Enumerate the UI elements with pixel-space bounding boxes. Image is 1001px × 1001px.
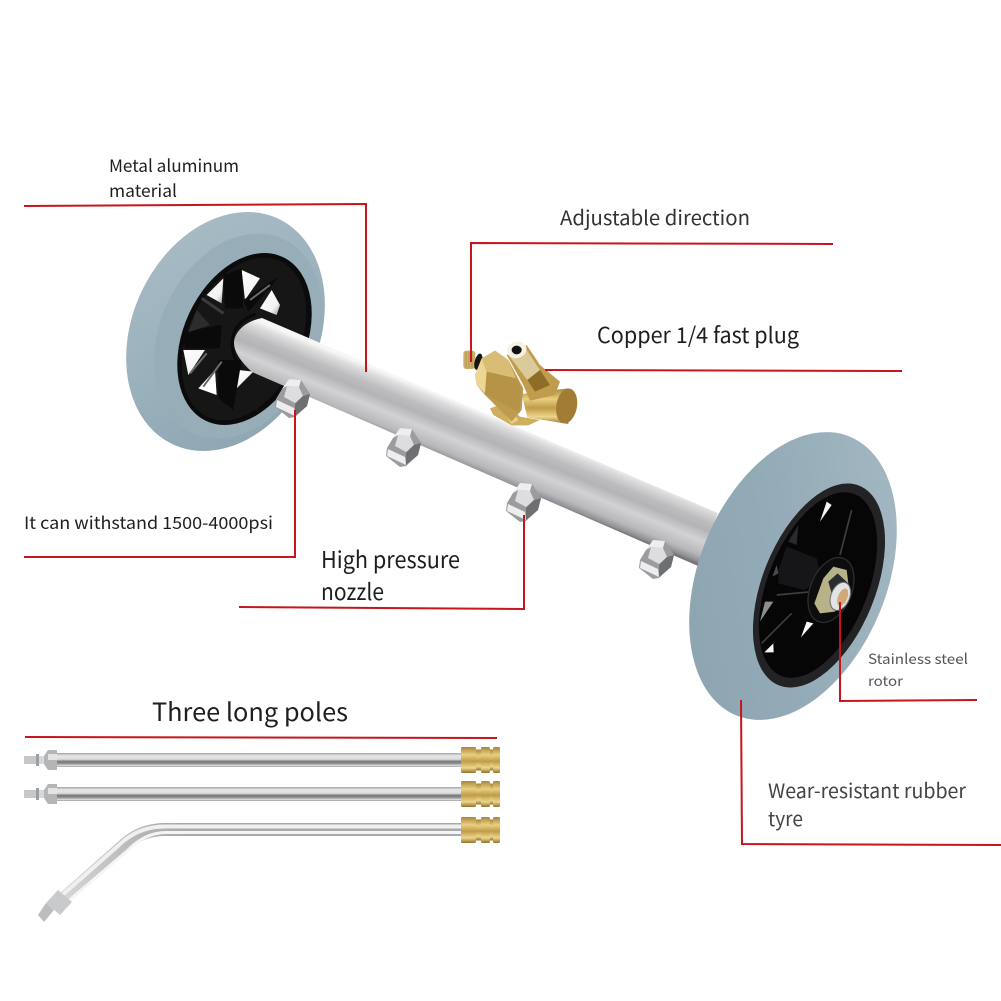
nozzles: [275, 379, 674, 579]
label: adjustable direction: Adjustable direction: [560, 202, 750, 231]
heading: three long poles: Three long poles: [152, 693, 348, 729]
label: stainless steel rotor: [868, 649, 968, 691]
label: stainless steel rotor: Stainless steel: [868, 649, 968, 669]
knurled stub: [463, 351, 475, 369]
label: high pressure nozzle: nozzle: [321, 573, 384, 607]
callout line: rubber tyre: [741, 700, 1001, 845]
straight pole 1: [24, 747, 500, 773]
base flange: [490, 403, 540, 425]
black rim: [726, 465, 912, 706]
label: rubber tyre: [768, 775, 966, 832]
callout line: stainless steel rotor: [840, 602, 977, 701]
end disc: [553, 387, 580, 425]
tyre: [89, 179, 362, 484]
aluminum tube: [232, 314, 718, 566]
bent pole: [38, 817, 500, 922]
o-ring: [473, 353, 484, 371]
stainless bolt: [826, 579, 854, 613]
callout line: adjustable direction: [471, 243, 833, 362]
right wheel: [649, 401, 937, 751]
label: stainless steel rotor: rotor: [868, 671, 904, 691]
label: high pressure nozzle: High pressure: [321, 541, 460, 575]
khaki nut: [814, 567, 848, 613]
callout line: metal aluminum material: [24, 204, 366, 372]
black hub: [151, 231, 338, 447]
hex body: [475, 351, 523, 422]
label: metal aluminum material: Metal aluminum: [109, 152, 239, 177]
axle washer: [799, 551, 863, 629]
left wheel: [89, 179, 362, 484]
callout line: pressure rating: [24, 410, 295, 557]
label: metal aluminum material: [109, 152, 239, 202]
callout line: copper plug: [545, 370, 902, 371]
callout line: high pressure nozzle: [239, 515, 524, 609]
straight pole 2: [24, 781, 500, 807]
underline: three long poles: [25, 737, 497, 738]
quick plug: [507, 345, 560, 401]
brass swivel: [463, 339, 580, 425]
spokes, gaps and axle: [760, 502, 863, 652]
wheel spokes and gaps: [157, 238, 331, 440]
label: copper plug: Copper 1/4 fast plug: [597, 318, 800, 350]
tube collar: [232, 314, 256, 368]
label: rubber tyre: tyre: [768, 803, 803, 832]
label: metal aluminum material: material: [109, 177, 177, 202]
label: high pressure nozzle: [321, 541, 460, 607]
label: pressure rating: It can withstand 1500-4000psi: [24, 509, 273, 534]
tyre: [649, 401, 937, 751]
label: rubber tyre: Wear-resistant rubber: [768, 775, 966, 804]
cylinder: [522, 388, 568, 424]
three long poles: [24, 747, 500, 922]
